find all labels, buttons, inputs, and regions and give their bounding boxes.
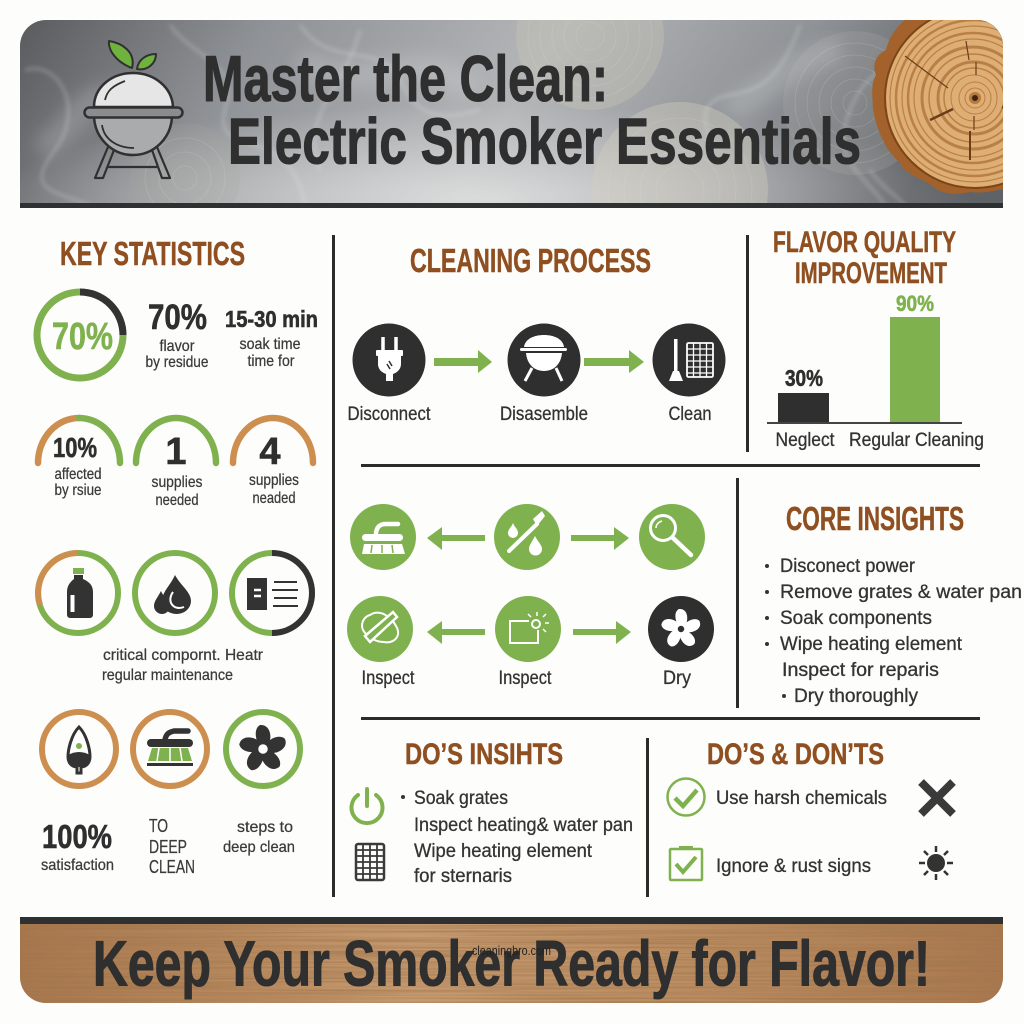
bullet list: Dry thoroughly xyxy=(794,685,918,707)
footer banner xyxy=(20,917,1003,1003)
stat: 4 supplies needed: neaded xyxy=(252,490,296,507)
icon: cross xyxy=(921,782,953,814)
stat: 1 supplies needed: 1 xyxy=(165,431,187,473)
stat: 100% satisfaction: 100% xyxy=(42,818,112,855)
list: do's xyxy=(401,787,633,887)
bar: neglect 30%: Neglect xyxy=(776,429,835,451)
bullet list: Wipe heating element xyxy=(780,633,963,655)
stat: 15-30 min soak time: 15-30 min xyxy=(225,306,318,332)
icon: sun xyxy=(919,846,953,880)
panel dividers xyxy=(332,235,980,897)
step: inspect panel xyxy=(495,596,561,689)
stat: 15-30 min soak time: time for xyxy=(248,353,295,370)
heading: flavor quality improvement: IMPROVEMENT xyxy=(795,257,947,290)
panel: do's insights xyxy=(351,738,633,887)
heading: key statistics: KEY STATISTICS xyxy=(60,235,245,272)
step: magnifier xyxy=(639,504,705,570)
icon: kettle grill with leaves xyxy=(84,41,182,178)
icon: water drops ring xyxy=(135,553,215,633)
icon: grate xyxy=(356,844,384,880)
stat: 4 supplies needed xyxy=(233,418,313,507)
title: Master the Clean: xyxy=(203,42,608,115)
icon: probe ring xyxy=(42,712,116,786)
text: steps to deep clean xyxy=(223,819,295,856)
stat: 100% satisfaction xyxy=(41,818,114,874)
icon: fan ring xyxy=(226,712,300,786)
icon: wood slice xyxy=(872,20,1003,194)
bar: regular cleaning 90% xyxy=(849,291,984,451)
stat: 100% satisfaction: satisfaction xyxy=(41,857,114,874)
title xyxy=(203,42,861,178)
text: rust signs: Ignore & rust signs xyxy=(716,855,871,877)
icon: power xyxy=(351,789,382,823)
arrow xyxy=(584,350,644,373)
bar: neglect 30%: 30% xyxy=(785,365,823,391)
text: critical component xyxy=(102,647,264,684)
chart: flavor quality improvement xyxy=(767,226,984,451)
heading: do's and don'ts: DO’S & DON’TS xyxy=(707,738,884,771)
text: steps to deep clean: steps to xyxy=(237,819,293,836)
bar: regular cleaning 90%: Regular Cleaning xyxy=(849,429,984,451)
panel: process steps continued xyxy=(347,504,714,689)
stat: 15-30 min soak time: soak time xyxy=(240,336,301,353)
stat: 10% affected: 10% xyxy=(53,432,97,463)
arrow xyxy=(427,527,485,550)
stat: 1 supplies needed xyxy=(136,418,216,509)
text: to deep clean: DEEP xyxy=(149,837,187,857)
watermark: cleaningbro.com xyxy=(472,943,551,958)
bar: neglect 30% xyxy=(776,365,835,451)
step: inspect scrub xyxy=(347,596,415,689)
arrow xyxy=(571,527,629,550)
step: clean: Clean xyxy=(668,403,712,425)
step: dry fan: Dry xyxy=(663,667,691,689)
list: do's: Soak grates xyxy=(414,787,508,809)
list: do's: for sternaris xyxy=(414,865,512,887)
stat: 70% ring: 70% xyxy=(52,316,113,358)
stat: 70% flavor by residue: 70% xyxy=(148,298,207,337)
stat: 4 supplies needed: 4 xyxy=(259,431,281,473)
arrow xyxy=(427,621,485,644)
stat: 15-30 min soak time xyxy=(225,306,318,370)
step: dry fan xyxy=(648,596,714,689)
step: disassemble: Disasemble xyxy=(500,403,588,425)
bullet list: Inspect for reparis xyxy=(782,659,939,681)
icon: grates ring xyxy=(232,553,312,633)
icon: check circle xyxy=(668,778,704,816)
bullet list: Remove grates & water pan xyxy=(780,581,1022,603)
panel: cleaning process xyxy=(348,242,726,425)
list: do's: Inspect heating& water pan xyxy=(414,814,633,836)
step: brush xyxy=(350,504,416,570)
header banner xyxy=(20,20,1003,208)
step: clean xyxy=(652,324,726,425)
bar: regular cleaning 90%: 90% xyxy=(896,291,934,316)
stat: 10% affected: affected xyxy=(54,466,102,483)
bullet list: Soak components xyxy=(780,607,932,629)
icon: brush ring xyxy=(133,712,207,786)
bullet list: Disconect power xyxy=(780,555,915,577)
text: to deep clean xyxy=(149,816,195,877)
stat: 1 supplies needed: supplies xyxy=(152,474,202,491)
heading: do's insights: DO’S INSIHTS xyxy=(405,738,563,771)
icon: clipboard check xyxy=(670,846,702,880)
text: steps to deep clean: deep clean xyxy=(223,839,295,856)
panel: core insights xyxy=(765,500,1022,707)
panel: key statistics xyxy=(37,235,318,877)
text: harsh chemicals: Use harsh chemicals xyxy=(716,787,887,809)
text: critical component: regular maintenance xyxy=(102,667,233,684)
heading: cleaning process: CLEANING PROCESS xyxy=(410,242,651,279)
stat: 70% flavor by residue: flavor xyxy=(160,338,195,355)
icon: bottle ring xyxy=(38,553,118,633)
text: to deep clean: TO xyxy=(149,816,168,836)
step: inspect scrub: Inspect xyxy=(362,667,415,689)
arrow xyxy=(434,350,492,373)
arrow xyxy=(573,621,631,644)
stat: 70% flavor by residue: by residue xyxy=(146,354,209,371)
step: inspect panel: Inspect xyxy=(498,667,552,689)
text: to deep clean: CLEAN xyxy=(149,857,195,877)
panel: do's and don'ts xyxy=(668,738,953,880)
step: disconnect xyxy=(348,324,431,425)
step: disassemble xyxy=(500,324,588,425)
step: disconnect: Disconnect xyxy=(348,403,431,425)
heading: flavor quality improvement xyxy=(773,226,956,290)
stat: 70% flavor by residue xyxy=(146,298,209,371)
stat: 10% affected: by rsiue xyxy=(54,482,102,499)
list: do's: Wipe heating element xyxy=(414,840,593,862)
stat: 10% affected xyxy=(38,418,120,499)
text: critical component: critical compornt. Heatr xyxy=(103,647,264,664)
bullet list xyxy=(765,555,1022,707)
step: toothbrush and water xyxy=(494,504,560,570)
stat: 70% ring xyxy=(37,292,123,378)
stat: 4 supplies needed: supplies xyxy=(249,472,299,489)
stat: 1 supplies needed: needed xyxy=(156,492,198,509)
